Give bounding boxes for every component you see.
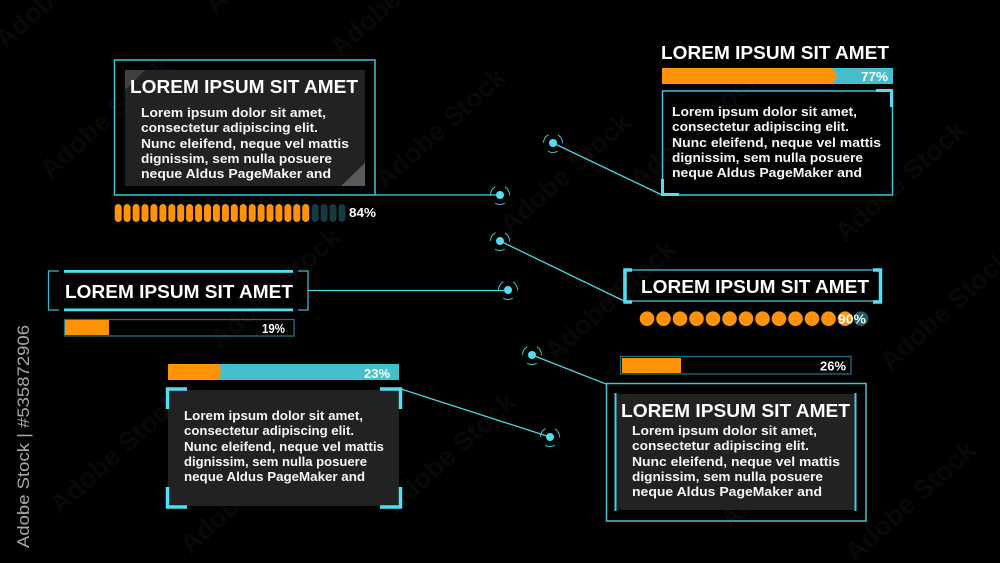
connector: bottom left: [401, 389, 563, 450]
text: Adobe Stock: [34, 51, 177, 184]
text: Adobe Stock: [369, 61, 512, 194]
panel: top right: [661, 43, 893, 195]
panel: middle right: 90%: [838, 312, 866, 326]
panel: top left: neque Aldus PageMaker and: [141, 166, 331, 181]
panel: bottom left: dignissim, sem nulla posuere: [184, 454, 367, 469]
panel: middle left: LOREM IPSUM SIT AMET: [65, 282, 293, 302]
text: Adobe Stock: [174, 426, 317, 559]
panel: middle left: 19%: [262, 321, 285, 336]
panel: top right: consectetur adipiscing elit.: [672, 119, 849, 134]
progress: 84 percent pills: [115, 204, 376, 222]
panel: bottom right: LOREM IPSUM SIT AMET: [621, 401, 850, 421]
panel: bottom left: consectetur adipiscing elit.: [184, 423, 354, 438]
progress: 84 percent pills: 84%: [349, 205, 376, 220]
panel: top right: 77%: [861, 69, 888, 84]
panel: bottom right: Lorem ipsum dolor sit amet,: [632, 423, 817, 438]
connector: middle right: [487, 228, 624, 301]
panel: middle right: [624, 270, 881, 326]
text: Adobe Stock: [714, 401, 857, 534]
panel: bottom right: Nunc eleifend, neque vel mattis: [632, 454, 840, 469]
panel: bottom right: 26%: [820, 358, 846, 374]
text: Adobe Stock: [829, 114, 972, 247]
panel: bottom left: [168, 364, 400, 507]
panel: bottom left: Lorem ipsum dolor sit amet,: [184, 408, 363, 423]
panel: top left: LOREM IPSUM SIT AMET: [130, 77, 358, 97]
panel: middle right: LOREM IPSUM SIT AMET: [641, 277, 869, 297]
panel: top left: consectetur adipiscing elit.: [141, 120, 318, 135]
connector: top left: [375, 182, 513, 208]
panel: top right: Lorem ipsum dolor sit amet,: [672, 104, 857, 119]
panel: bottom right: dignissim, sem nulla posuere: [632, 469, 823, 484]
panel: bottom left: neque Aldus PageMaker and: [184, 469, 365, 484]
connector: bottom right: [519, 342, 606, 384]
panel: bottom left: 23%: [364, 366, 390, 381]
panel: top left: dignissim, sem nulla posuere: [141, 151, 332, 166]
text: Adobe Stock: [494, 106, 637, 239]
panel: top right: LOREM IPSUM SIT AMET: [661, 43, 889, 63]
panel: middle left: [48, 270, 308, 336]
connector: middle left: [308, 277, 521, 303]
panel: top right: dignissim, sem nulla posuere: [672, 150, 863, 165]
panel: top left: [114, 60, 375, 195]
panel: bottom right: neque Aldus PageMaker and: [632, 484, 822, 499]
stock id side text: Adobe Stock | #535872906: [14, 325, 33, 548]
text: Adobe Stock: [624, 61, 767, 194]
panel: bottom left: Nunc eleifend, neque vel mattis: [184, 439, 384, 454]
panel: top right: Nunc eleifend, neque vel mattis: [672, 135, 881, 150]
panel: top left: Lorem ipsum dolor sit amet,: [141, 105, 326, 120]
connector: top right: [540, 130, 662, 195]
text: Adobe Stock: [44, 386, 187, 519]
panel: top left: Nunc eleifend, neque vel mattis: [141, 136, 349, 151]
panel: top right: neque Aldus PageMaker and: [672, 165, 862, 180]
text: Adobe Stock: [539, 233, 682, 366]
text: Adobe Stock: [204, 221, 347, 354]
panel: bottom right: [606, 356, 866, 521]
panel: bottom right: consectetur adipiscing elit.: [632, 438, 809, 453]
text: Adobe Stock: [379, 386, 522, 519]
